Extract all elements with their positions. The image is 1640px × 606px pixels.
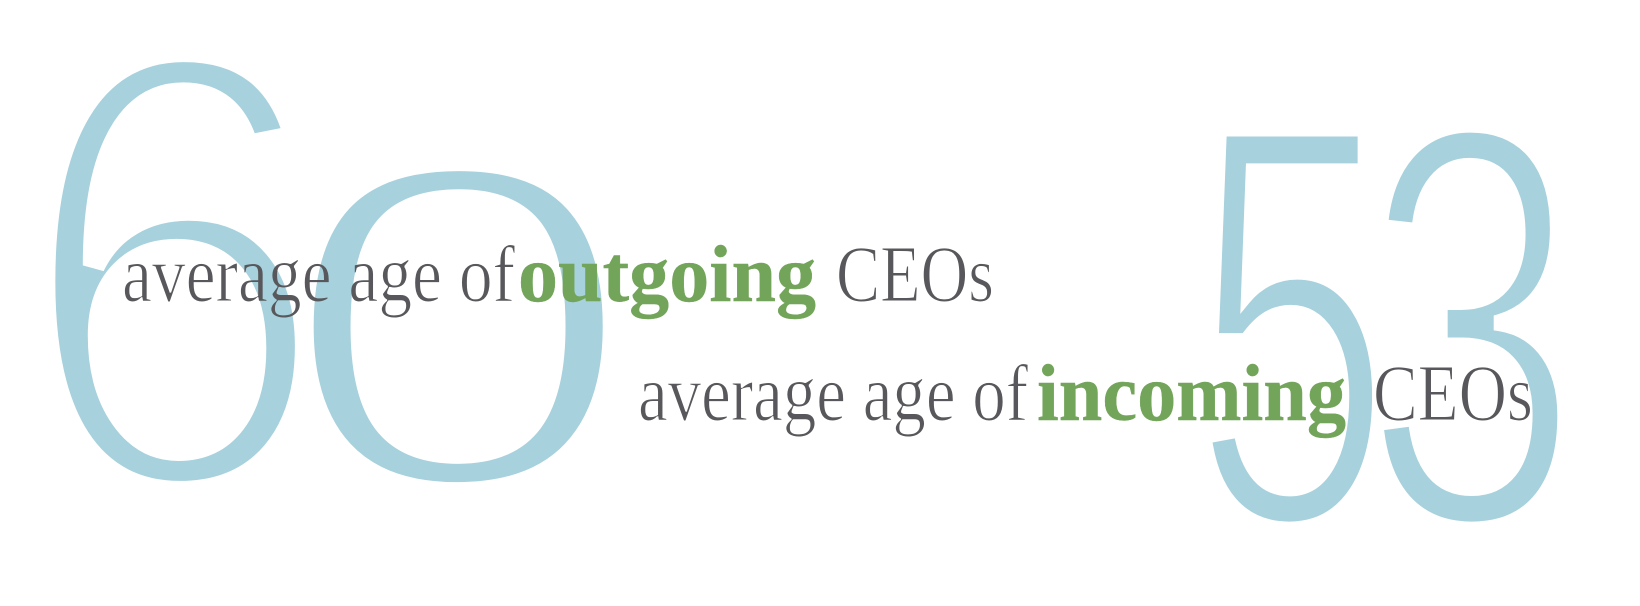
label: average age of outgoing CEOs: outgoing — [518, 231, 816, 319]
big number: 60 — [55, 62, 603, 482]
big number: 53 — [1192, 4, 1580, 606]
label: average age of incoming CEOs — [638, 350, 1533, 438]
label: average age of incoming CEOs: average age of — [638, 350, 1028, 438]
infographic: average CEO ages — [55, 62, 1558, 522]
label: average age of incoming CEOs: incoming — [1037, 350, 1346, 438]
big number: 60: 0 — [278, 69, 638, 583]
label: average age of outgoing CEOs: CEOs — [836, 231, 994, 319]
label: average age of incoming CEOs: CEOs — [1373, 350, 1533, 438]
label: average age of outgoing CEOs: average age of — [122, 231, 515, 319]
label: average age of outgoing CEOs — [122, 231, 994, 319]
